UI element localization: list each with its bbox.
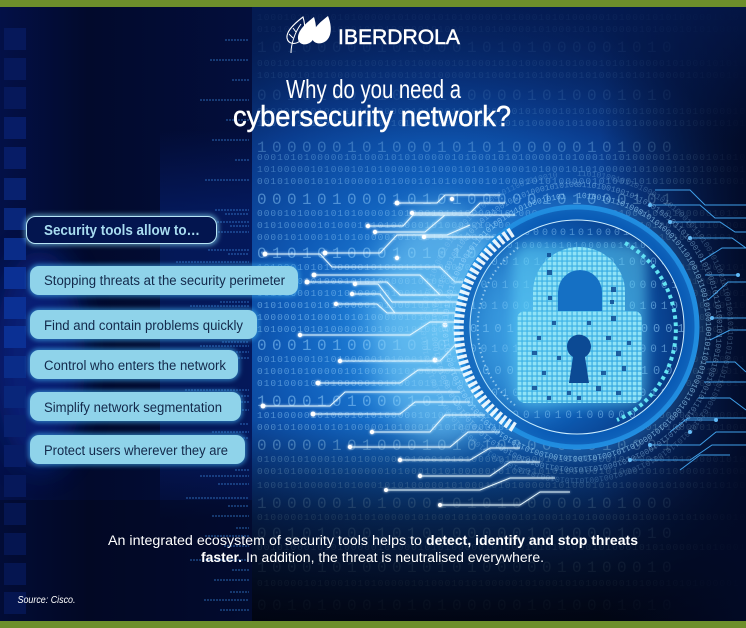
binary code field: 0101010001010100000101000101: [257, 245, 677, 263]
title: cybersecurity network?: [233, 101, 511, 133]
bottom green bar: [0, 621, 746, 628]
disc binary: 0000101000101010000010100010101000001: [470, 241, 744, 251]
binary code field: 0010100010101000001010001010: [257, 525, 677, 543]
summary text: faster.: [201, 550, 242, 565]
inner disc: [470, 220, 684, 434]
disc binary: 00101000101010000010100010: [470, 344, 746, 356]
pill: stopping threats: [28, 264, 300, 297]
heading pill: security tools: [24, 214, 219, 246]
binary code field: 0010100010101000001010001010: [257, 87, 677, 105]
pill: control who enters: [28, 348, 240, 381]
binary code field: 0000010100010101000001010001: [257, 437, 677, 455]
binary code field: 0001010001010100000101000101: [257, 337, 677, 355]
heading pill: security tools: Security tools allow to…: [44, 223, 200, 239]
binary code field: 0001010001010100000101000101: [257, 191, 677, 209]
summary text: detect, identify and stop threats: [426, 533, 638, 548]
binary rings around the lock: 1101010010110100010101000101101001011001010010010110101001011010001010100010110100101100101001001011010100101101000101010001011010010110010100100101101010010110100010101000101101001011001010010: [421, 170, 734, 484]
circuit lines right of the lock: [630, 190, 746, 470]
disc binary: 10100010101000001010001010: [470, 301, 746, 313]
title: Why do you need a: [286, 74, 461, 104]
binary code field: 1000101000101010000010100010: [257, 393, 677, 411]
summary text: In addition, the threat is neutralised everywhere.: [246, 550, 544, 565]
padlock glow: [513, 243, 647, 407]
top green bar: [0, 0, 746, 7]
keyhole: [567, 335, 591, 383]
ticked arc: [459, 232, 515, 428]
shackle opening: [558, 270, 602, 315]
circuit nodes right of the lock: [628, 203, 740, 462]
padlock body: [517, 311, 642, 403]
background fades: [250, 0, 746, 628]
binary rings around the lock: 1010010110100010101000101101001011001010010010110101001011010001010100010110100101100101001001011010100101101000101010001011010010110010100100101101010010110100010101: [442, 192, 712, 462]
source note: Source: Cisco.: [18, 595, 76, 606]
circuit nodes left of the lock: [261, 197, 454, 507]
dotted arc: [617, 243, 676, 420]
disc binary: [470, 228, 684, 418]
icon: three leaves: [287, 16, 331, 53]
pill: simplify segmentation: [28, 390, 243, 423]
wordmark: IBERDROLA: [338, 26, 460, 49]
binary code field: 1000101000101010000010100010: [257, 559, 677, 577]
summary text: [108, 533, 638, 565]
disc binary: 1000101000001010001010: [470, 364, 738, 378]
security lock emblem: [453, 203, 746, 451]
circuit lines left of the lock: [263, 195, 570, 505]
binary code field: 1000001010001010100000101000: [257, 495, 677, 513]
pill: stopping threats: Stopping threats at the security perimeter: [44, 273, 285, 288]
logo: Iberdrola: [287, 16, 460, 53]
binary code field: [257, 12, 746, 615]
pill: control who enters: Control who enters the network: [44, 358, 226, 373]
pill: find and contain: [28, 308, 259, 341]
binary code field: 0010100010101000001010001010: [257, 597, 677, 615]
binary rings around the lock: 0110100100101101010010110100010101000101101001011001010010010110101001011010001010100010110100101100101001001011010100101101000101010001011010010110010100100101101010010110100010101000101101: [432, 182, 722, 472]
pill: protect users: Protect users wherever they are: [44, 443, 228, 458]
binary code field: 1000001010001010100000101000: [257, 139, 677, 157]
disc binary: 00010100010101000001010001: [470, 280, 746, 292]
disc binary: 10001010001010100000101000: [470, 257, 746, 269]
pill: simplify segmentation: Simplify network segmentation: [44, 400, 222, 415]
outer ring: [457, 207, 697, 447]
summary text: An integrated ecosystem of security tools helps to: [108, 533, 422, 548]
disc binary: 0101000101010000010100: [470, 322, 738, 336]
pill: find and contain: Find and contain problems quickly: [44, 318, 243, 333]
padlock shackle: [533, 247, 625, 315]
title: [233, 74, 511, 133]
dark pixels: [532, 253, 631, 400]
disc binary: 10100010101000001010001010: [470, 410, 746, 422]
left dark column: [0, 0, 252, 628]
pill: protect users: [28, 433, 247, 466]
binary code field: 1010000010100010101000001010: [257, 39, 677, 57]
disc binary: 01010001010100000101000101: [470, 388, 746, 400]
